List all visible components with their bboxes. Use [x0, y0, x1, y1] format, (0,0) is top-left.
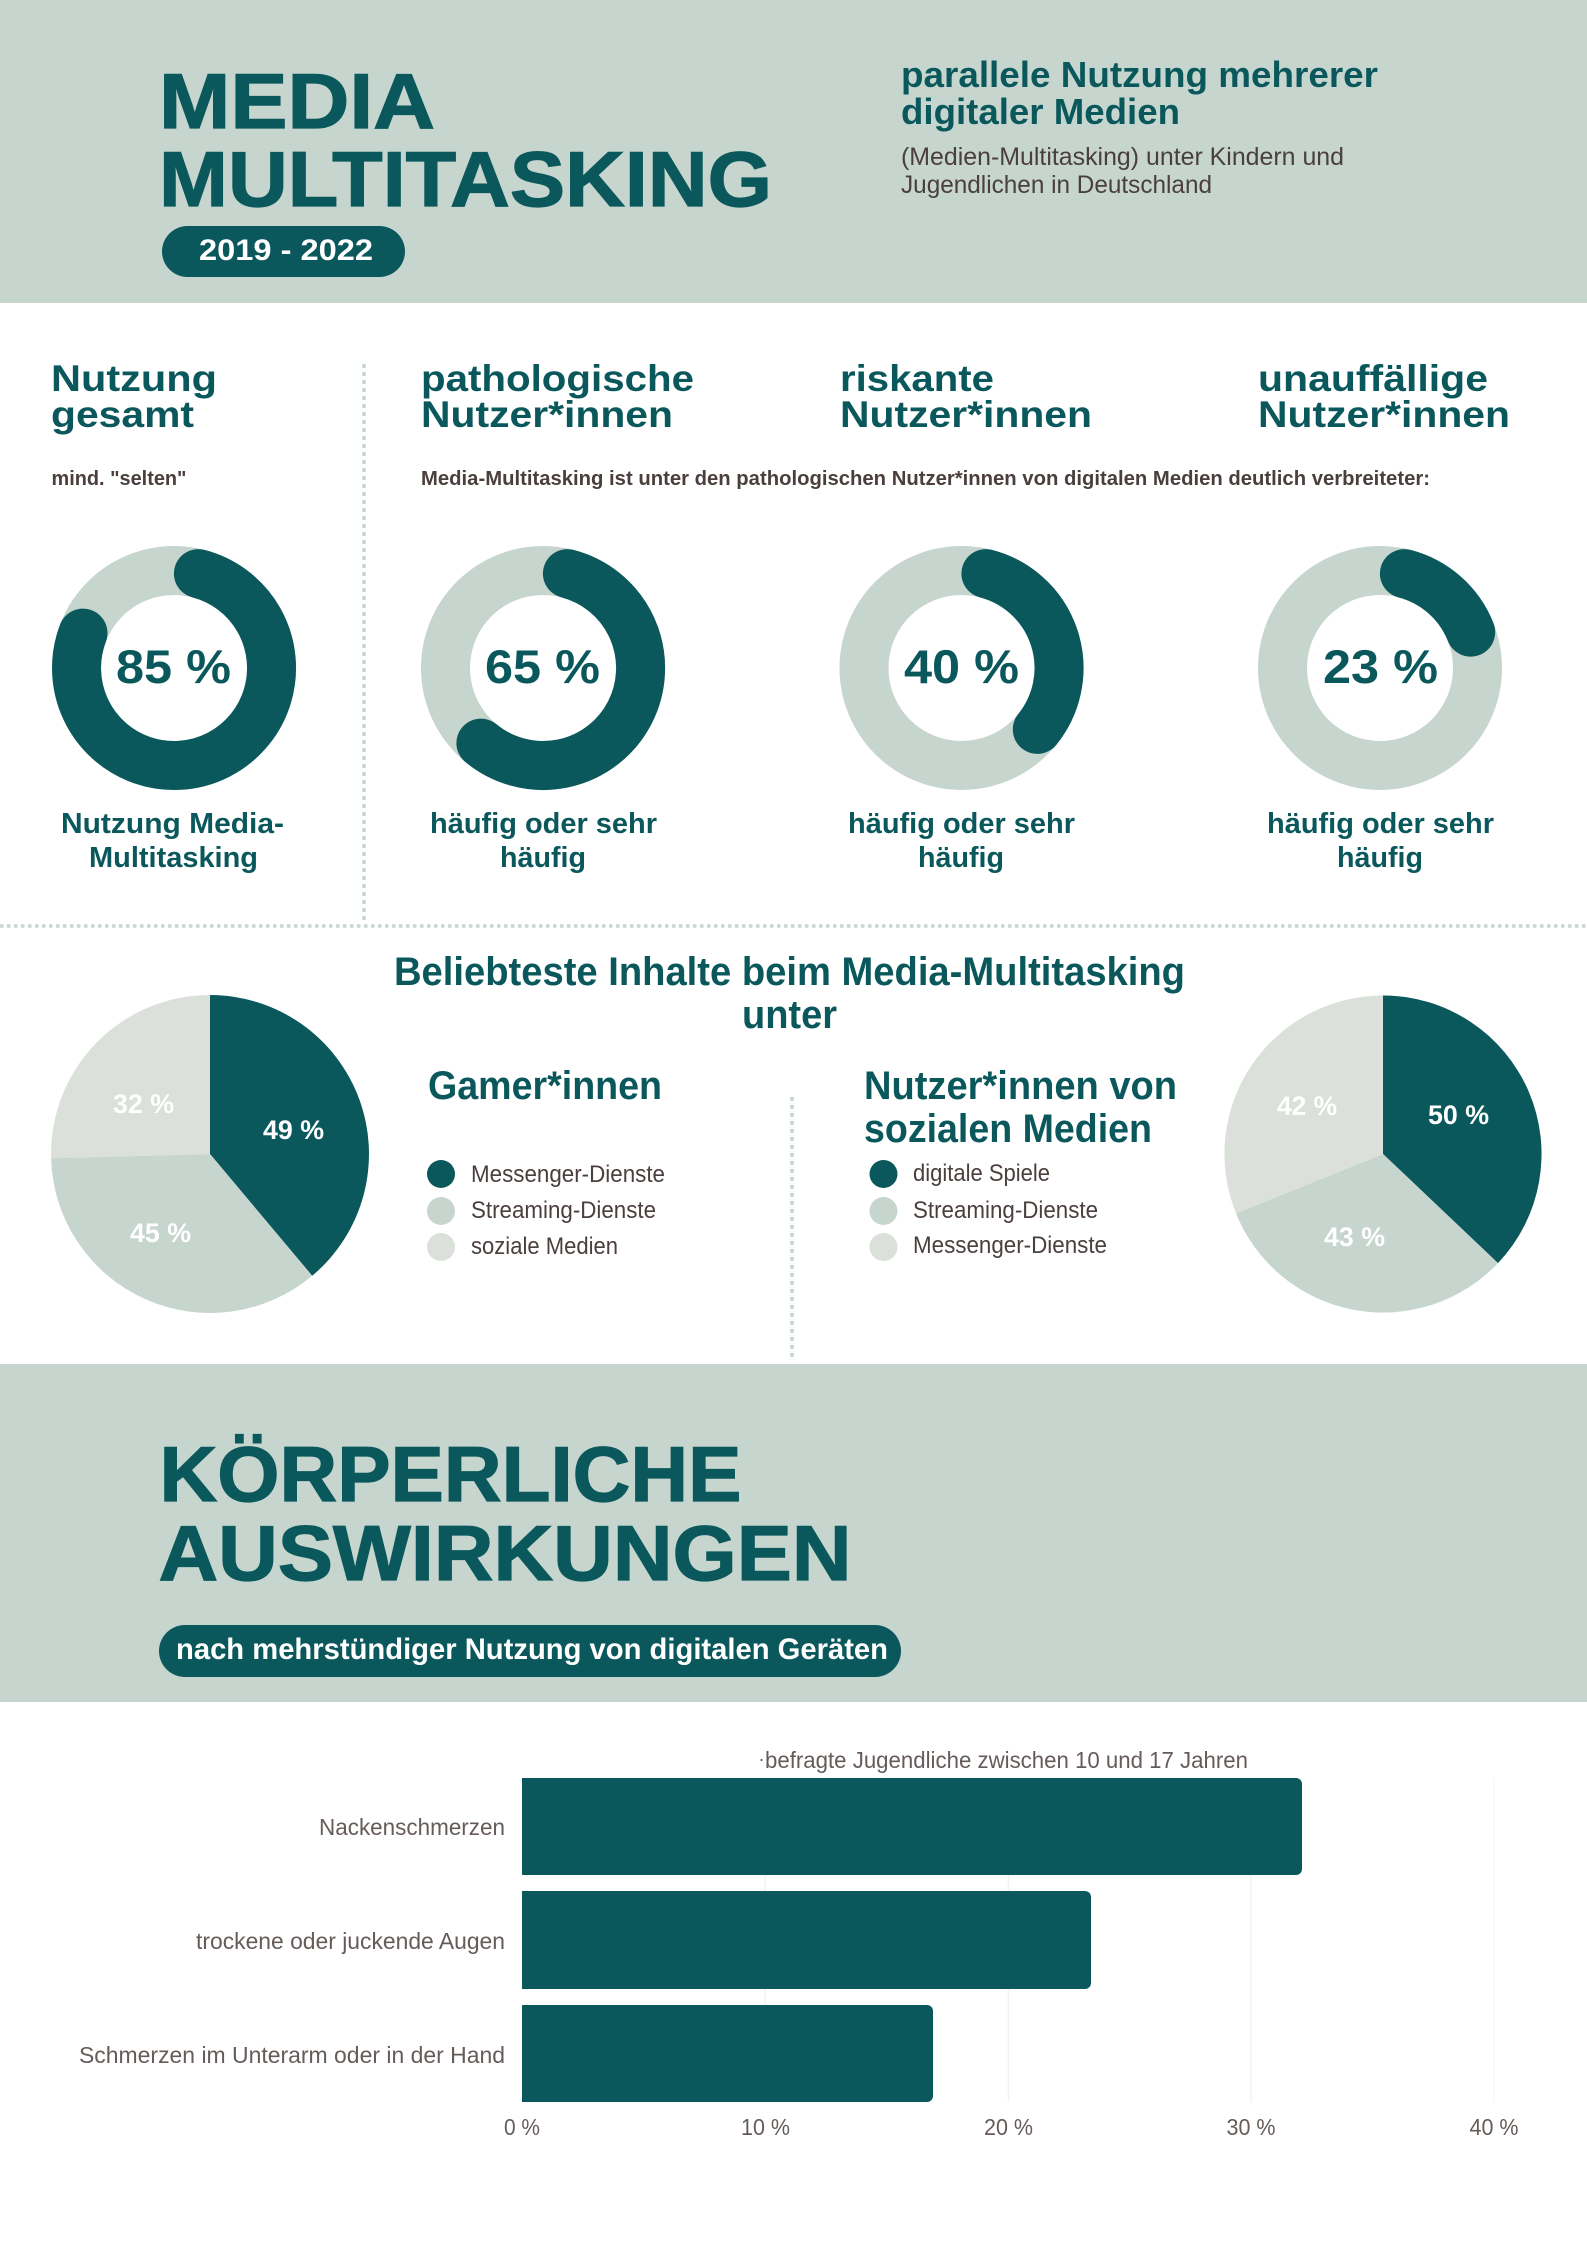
- heading: pathologische Nutzer*innen: Nutzer*innen: [421, 394, 673, 435]
- donut chart: 65 %: 65 %: [485, 640, 600, 693]
- category labels: Nackenschmerzen: [319, 1814, 505, 1840]
- heading: pathologische Nutzer*innen: pathologische: [421, 358, 694, 399]
- legend: Gamer*innen: Streaming-Dienste: [471, 1197, 656, 1224]
- chart note: befragte Jugendliche zwischen 10 und 17 Jahren: [765, 1747, 1248, 1773]
- pie chart: Nutzer*innen von sozialen Medien: 42 %: [1277, 1091, 1337, 1121]
- donut chart: 40 %: [864, 570, 1059, 766]
- bar: Schmerzen im Unterarm oder in der Hand: [522, 2005, 933, 2102]
- subtitle pill: [159, 1625, 901, 1677]
- title: MULTITASKING: [159, 135, 772, 223]
- axis labels: 10 %: [741, 2114, 790, 2140]
- pie chart: Gamer*innen: 45 %: [130, 1218, 191, 1248]
- heading: Nutzer*innen von sozialen Medien: sozialen Medien: [864, 1107, 1152, 1151]
- legend: Nutzer*innen von sozialen Medien: [870, 1160, 1107, 1261]
- label: häufig oder sehr häufig (23 %): häufig oder sehr: [1267, 808, 1494, 840]
- label: häufig oder sehr häufig (65 %): häufig: [500, 842, 586, 874]
- heading: riskante Nutzer*innen: riskante: [840, 358, 994, 399]
- heading: Beliebteste Inhalte: unter: [742, 993, 837, 1037]
- category labels: [79, 1814, 505, 2068]
- pie chart: Nutzer*innen von sozialen Medien: [1224, 996, 1542, 1313]
- label: häufig oder sehr häufig (40 %): [848, 808, 1075, 874]
- axis labels: [504, 2114, 1518, 2140]
- note: Verbreitung: Media-Multitasking ist unter den pathologischen Nutzer*innen von digitalen Medien deutlich verbreiteter:: [421, 468, 1430, 490]
- heading: Beliebteste Inhalte: Beliebteste Inhalte beim Media-Multitasking: [394, 950, 1185, 994]
- category labels: Schmerzen im Unterarm oder in der Hand: [79, 2042, 505, 2068]
- intro text: [901, 143, 1344, 199]
- heading: unauffällige Nutzer*innen: Nutzer*innen: [1258, 394, 1510, 435]
- header background: [0, 0, 1587, 303]
- heading: pathologische Nutzer*innen: [421, 358, 694, 435]
- heading: Nutzung gesamt: gesamt: [51, 394, 194, 435]
- heading: Nutzung gesamt: [51, 358, 217, 435]
- label: häufig oder sehr häufig (23 %): häufig: [1337, 842, 1423, 874]
- donut chart: 23 %: 23 %: [1323, 640, 1438, 693]
- title: [159, 57, 772, 223]
- heading: Nutzer*innen von sozialen Medien: Nutzer*innen von: [864, 1064, 1177, 1108]
- legend: Gamer*innen: [427, 1160, 665, 1261]
- label: häufig oder sehr häufig (40 %): häufig oder sehr: [848, 808, 1075, 840]
- heading: riskante Nutzer*innen: Nutzer*innen: [840, 394, 1092, 435]
- donut chart: 23 %: [1282, 570, 1478, 766]
- heading: unauffällige Nutzer*innen: unauffällige: [1258, 358, 1488, 399]
- legend: Nutzer*innen von sozialen Medien: Streaming-Dienste: [913, 1197, 1098, 1224]
- donut chart: 85 %: 85 %: [116, 640, 231, 693]
- label: Nutzung Media-Multitasking: Multitasking: [89, 842, 258, 874]
- axis labels: 0 %: [504, 2114, 540, 2140]
- axis labels: 20 %: [984, 2114, 1033, 2140]
- bar: trockene oder juckende Augen: [522, 1891, 1091, 1989]
- label: häufig oder sehr häufig (23 %): [1267, 808, 1494, 874]
- donut chart: 85 %: [76, 570, 272, 766]
- note: mind. selten: mind. "selten": [52, 468, 186, 490]
- heading: Beliebteste Inhalte: [394, 950, 1185, 1037]
- date pill: 2019 - 2022: [199, 234, 373, 267]
- section title: AUSWIRKUNGEN: [158, 1509, 852, 1597]
- label: häufig oder sehr häufig (65 %): häufig oder sehr: [430, 808, 657, 840]
- axis labels: 40 %: [1470, 2114, 1518, 2140]
- label: Nutzung Media-Multitasking: Nutzung Media-: [61, 808, 284, 840]
- legend: Gamer*innen: soziale Medien: [471, 1233, 618, 1260]
- heading: riskante Nutzer*innen: [840, 358, 1092, 435]
- bar chart: körperliche Beschwerden: [79, 1747, 1518, 2140]
- date pill: [162, 226, 405, 277]
- label: häufig oder sehr häufig (65 %): [430, 808, 657, 874]
- subtitle: digitaler Medien: [901, 91, 1180, 132]
- heading: Gamer*innen: Gamer*innen: [428, 1064, 662, 1108]
- section title: KÖRPERLICHE: [160, 1430, 742, 1518]
- heading: Nutzer*innen von sozialen Medien: [864, 1064, 1177, 1151]
- donut chart: 40 %: 40 %: [904, 640, 1019, 693]
- label: häufig oder sehr häufig (40 %): häufig: [918, 842, 1004, 874]
- pie chart: Gamer*innen: 49 %: [263, 1115, 324, 1145]
- category labels: trockene oder juckende Augen: [196, 1928, 505, 1954]
- intro text: Jugendlichen in Deutschland: [901, 171, 1212, 199]
- subtitle pill: nach mehrstündiger Nutzung von digitalen Geräten: [176, 1633, 888, 1666]
- pie chart: Gamer*innen: [51, 995, 369, 1313]
- heading: Nutzung gesamt: Nutzung: [51, 358, 217, 399]
- pie chart: Nutzer*innen von sozialen Medien: 50 %: [1428, 1100, 1489, 1130]
- title: MEDIA: [159, 57, 435, 145]
- heading: unauffällige Nutzer*innen: [1258, 358, 1510, 435]
- legend: Nutzer*innen von sozialen Medien: digitale Spiele: [913, 1160, 1050, 1187]
- subtitle: parallele Nutzung mehrerer: [901, 54, 1378, 95]
- subtitle: [901, 54, 1378, 132]
- axis labels: 30 %: [1226, 2114, 1276, 2140]
- donut chart: 65 %: [446, 570, 641, 766]
- section title: [158, 1430, 852, 1597]
- legend: Nutzer*innen von sozialen Medien: Messenger-Dienste: [913, 1232, 1107, 1259]
- bar: Nackenschmerzen: [522, 1778, 1302, 1875]
- label: Nutzung Media-Multitasking: [61, 808, 284, 874]
- legend: Gamer*innen: Messenger-Dienste: [471, 1161, 665, 1188]
- panel: header: [0, 0, 1587, 303]
- intro text: (Medien-Multitasking) unter Kindern und: [901, 143, 1344, 171]
- pie chart: Gamer*innen: 32 %: [113, 1089, 174, 1119]
- pie chart: Nutzer*innen von sozialen Medien: 43 %: [1324, 1222, 1385, 1252]
- section background: [0, 1364, 1587, 1702]
- panel: körperliche Auswirkungen: [0, 1364, 1587, 1702]
